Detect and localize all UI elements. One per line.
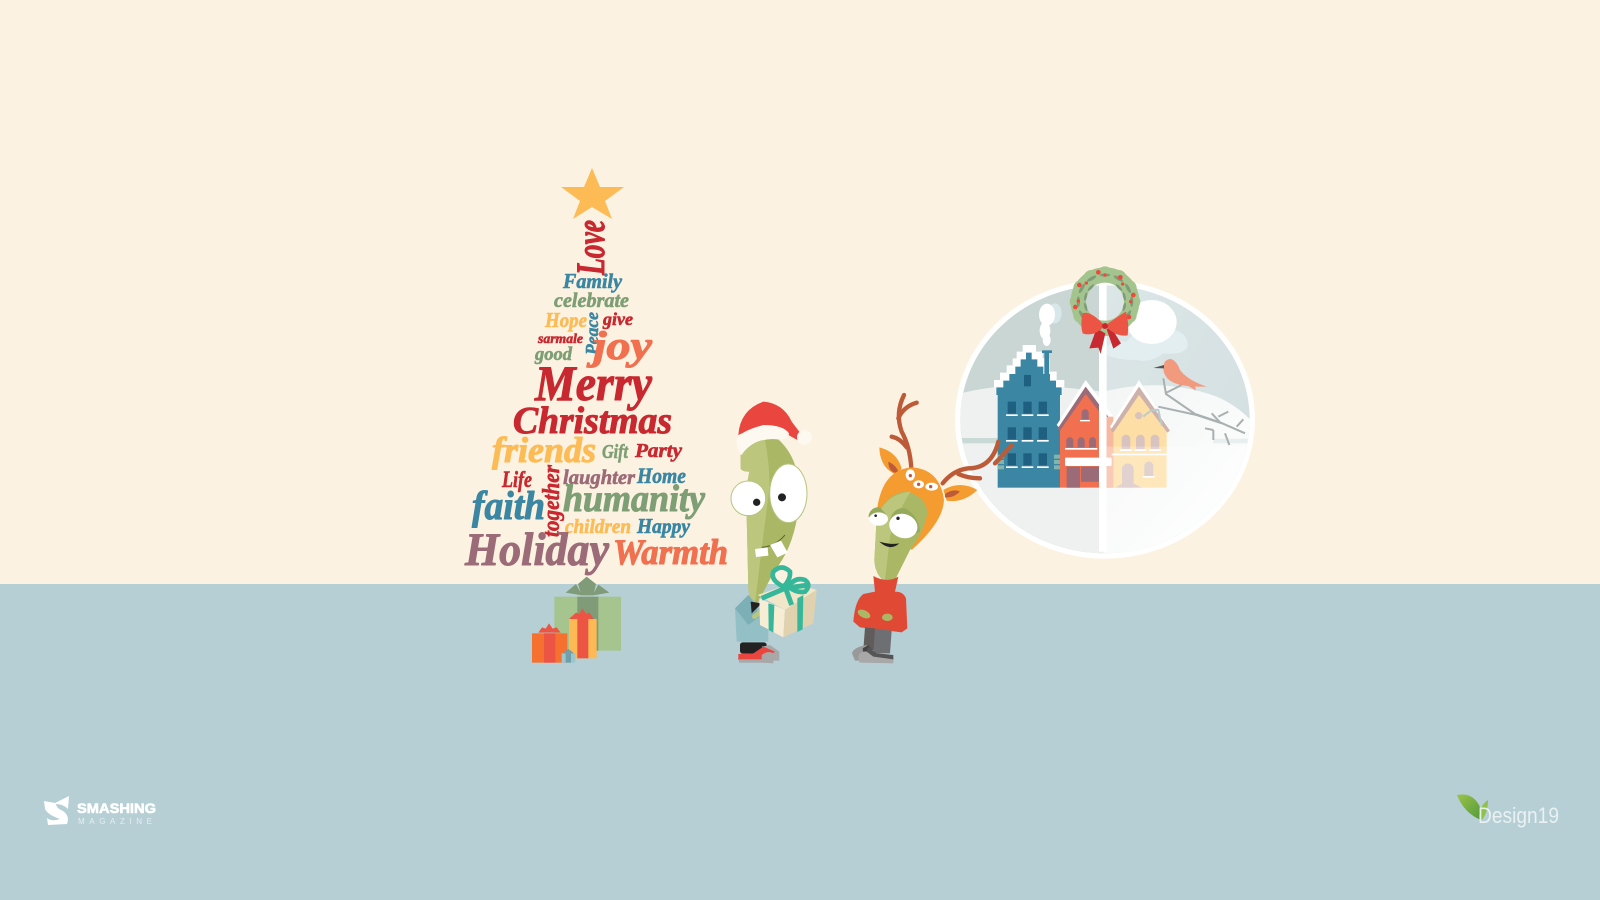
logo: Design19 — [1457, 794, 1559, 828]
word cloud tree: friends — [492, 430, 596, 470]
icon: star on tree — [561, 168, 624, 219]
mouth — [879, 542, 899, 547]
word cloud tree: Peace — [582, 312, 602, 356]
orange hat — [877, 467, 944, 550]
logo: Smashing Magazine: SMASHING — [77, 800, 156, 816]
word cloud tree: celebrate — [554, 288, 629, 312]
eyes — [731, 464, 807, 523]
word cloud tree: faith — [472, 483, 545, 528]
word cloud tree: Family — [562, 269, 623, 293]
orange house — [1057, 380, 1113, 488]
word cloud tree: good — [534, 344, 572, 365]
word cloud tree: Happy — [636, 514, 691, 538]
head highlight — [874, 492, 911, 581]
view through window — [960, 286, 1250, 554]
background wall — [0, 0, 1600, 584]
santa hat — [737, 402, 812, 455]
word cloud tree: laughter — [563, 465, 636, 489]
teal jacket — [735, 595, 768, 642]
word cloud tree: Gift — [602, 441, 629, 463]
body — [741, 439, 797, 603]
window mullion — [1099, 283, 1107, 552]
legs — [863, 627, 892, 653]
cloud — [1107, 300, 1188, 361]
snow gradient on right half — [1106, 446, 1166, 488]
word cloud tree: Merry — [534, 355, 653, 411]
word cloud tree: Love — [568, 220, 613, 276]
antlers — [892, 395, 1012, 483]
word cloud tree: Home — [636, 463, 686, 488]
word cloud tree: Life — [501, 467, 532, 492]
window scene — [950, 266, 1260, 560]
logo: Smashing Magazine — [44, 796, 156, 826]
word cloud tree: children — [565, 516, 631, 538]
yellow house — [1110, 380, 1170, 488]
floor — [0, 584, 1600, 900]
gifts under tree — [532, 577, 621, 663]
word cloud tree: humanity — [563, 478, 705, 520]
word cloud tree — [464, 220, 728, 576]
word cloud tree: Holiday — [464, 524, 609, 576]
word cloud tree: Christmas — [513, 400, 672, 442]
gift box — [758, 567, 817, 637]
word cloud tree: sarmale — [537, 332, 583, 347]
icon: S — [44, 796, 69, 825]
word cloud tree: Warmth — [613, 532, 728, 572]
icon: wreath — [1070, 266, 1140, 333]
legs and shoes — [738, 642, 779, 663]
window frame — [955, 280, 1255, 559]
eyes — [868, 507, 921, 542]
blue house — [994, 345, 1064, 488]
word cloud tree: give — [602, 309, 633, 329]
shoes — [852, 645, 893, 663]
word cloud tree: Hope — [544, 308, 587, 332]
hat eyes — [906, 469, 938, 491]
red sweater — [853, 576, 907, 632]
word cloud tree: joy — [586, 323, 652, 368]
character: reindeer hat — [852, 395, 1012, 663]
character: santa hat — [731, 402, 817, 663]
icon: leaf — [1457, 794, 1488, 820]
smoke — [1039, 303, 1062, 346]
icon: red bow — [1081, 312, 1128, 354]
hat ears — [879, 447, 977, 501]
head — [874, 492, 927, 581]
word cloud tree: Party — [634, 440, 682, 462]
word cloud tree: together — [539, 464, 565, 537]
body highlight — [741, 440, 769, 603]
bird and branch — [1143, 359, 1245, 445]
logo: Smashing Magazine: MAGAZINE — [78, 817, 152, 826]
logo: Design19: Design19 — [1478, 803, 1559, 828]
mouth and teeth — [755, 535, 788, 557]
